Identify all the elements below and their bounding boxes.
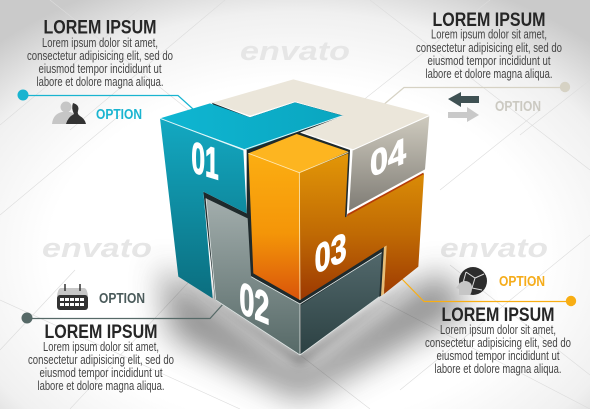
piece 03: orange xyxy=(248,134,424,300)
text block: top left xyxy=(27,18,173,89)
icon: calendar xyxy=(57,284,88,310)
text block: top right: LOREM IPSUM xyxy=(432,10,546,31)
icon: head with network xyxy=(456,267,487,295)
connector: 03 xyxy=(400,277,576,306)
connector: 04 xyxy=(382,82,570,106)
text block: top left: eiusmod tempor incididunt ut xyxy=(38,62,162,76)
text block: bottom right xyxy=(425,305,571,376)
text block: bottom left: LOREM IPSUM xyxy=(44,322,158,343)
text block: top left: Lorem ipsum dolor sit amet, xyxy=(42,36,158,50)
option label: beige: OPTION xyxy=(495,99,541,115)
text block: top left: consectetur adipisicing elit, sed do xyxy=(27,49,173,63)
watermark: envato left: envato xyxy=(42,233,152,263)
text block: bottom right: LOREM IPSUM xyxy=(442,305,554,326)
piece 04: beige xyxy=(213,79,429,218)
number 01: 01 xyxy=(191,133,219,190)
text block: top right: eiusmod tempor incididunt ut xyxy=(428,54,551,68)
3D cube xyxy=(160,79,429,355)
watermark: envato right: envato xyxy=(440,233,548,263)
icon: people xyxy=(52,102,86,124)
text block: bottom left xyxy=(28,322,174,393)
cube dark gaps xyxy=(203,102,424,355)
text block: top left: labore et dolore magna aliqua. xyxy=(36,75,164,89)
piece 02: grey xyxy=(206,198,387,355)
text block: bottom left: labore et dolore magna aliqua. xyxy=(38,379,164,393)
cube shadow xyxy=(160,265,470,400)
text block: bottom left: consectetur adipisicing elit, sed do xyxy=(28,353,174,367)
text block: top right: labore et dolore magna aliqua. xyxy=(426,67,552,81)
text block: bottom left: eiusmod tempor incididunt ut xyxy=(40,366,163,380)
contact shadow xyxy=(178,275,420,365)
text block: bottom left: Lorem ipsum dolor sit amet, xyxy=(43,340,159,354)
piece 01: blue xyxy=(160,102,343,298)
number 02: 02 xyxy=(239,273,269,335)
text block: top right xyxy=(416,10,562,81)
number 04: 04 xyxy=(370,131,406,185)
option label: orange: OPTION xyxy=(499,274,545,290)
connector: 01 xyxy=(18,90,193,109)
text block: top left: LOREM IPSUM xyxy=(44,18,156,38)
watermark: envato top: envato xyxy=(240,36,350,66)
option label: grey: OPTION xyxy=(99,291,145,307)
option label: blue: OPTION xyxy=(96,107,142,123)
number 03: 03 xyxy=(315,223,347,283)
text block: bottom right: Lorem ipsum dolor sit amet, xyxy=(440,323,556,337)
text block: top right: Lorem ipsum dolor sit amet, xyxy=(431,28,547,42)
icon: arrows xyxy=(448,92,479,122)
connector: 02 xyxy=(22,293,233,324)
